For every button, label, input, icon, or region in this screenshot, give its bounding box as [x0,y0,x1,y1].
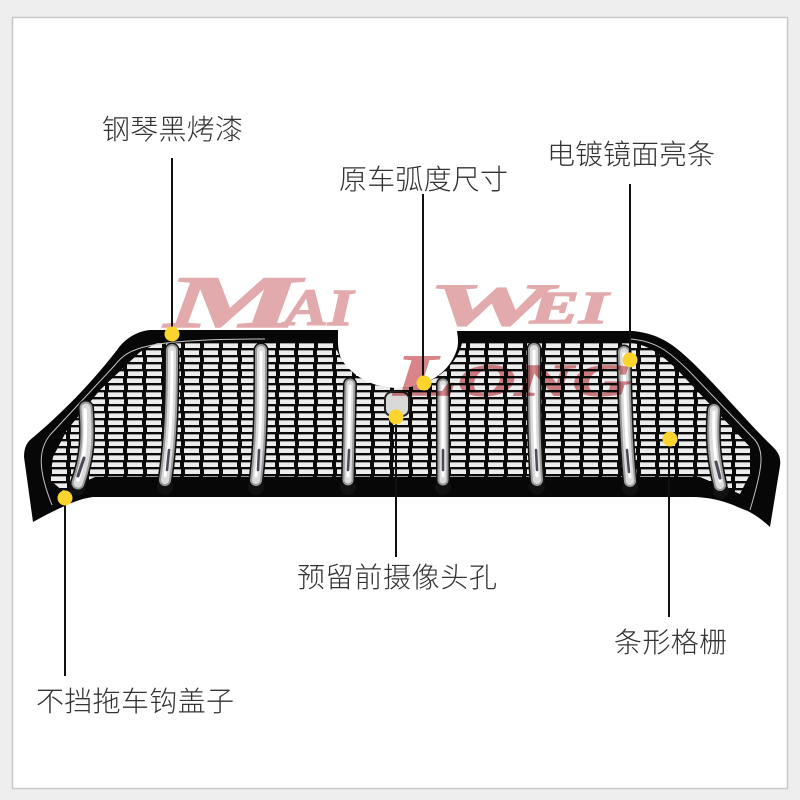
callout lines [65,158,669,676]
watermark: Long lower: L ONG [392,343,630,408]
label: piano black: 钢琴黑烤漆 [102,114,243,145]
frame highlights [41,339,761,510]
label: chrome strip: 电镀镜面亮条 [547,139,715,170]
watermark: Mai Wei upper: EI [528,282,611,333]
rib 5 [435,384,451,495]
rib 3 [248,350,264,495]
rib 1 [69,408,87,496]
rib 2 [157,350,173,495]
label: bar grille: 条形格栅 [614,627,727,658]
watermark: Mai Wei upper: AI [281,280,355,337]
rib 6 [529,349,545,495]
rib 4 [340,384,356,495]
chrome ribs [69,349,729,499]
camera hole [385,392,409,416]
yellow marker dots [58,326,678,506]
watermark: Mai Wei upper [163,262,611,344]
label: tow hook cover: 不挡拖车钩盖子 [36,686,234,717]
grille frame [24,330,780,527]
rib 8 [713,410,729,499]
label: camera hole: 预留前摄像头孔 [297,562,497,593]
watermark: Mai Wei upper: M [163,262,304,344]
label: original curvature: 原车弧度尺寸 [339,164,508,195]
mesh panel [50,343,750,494]
watermark: Mai Wei upper: W [428,272,558,338]
rib 7 [622,352,638,496]
